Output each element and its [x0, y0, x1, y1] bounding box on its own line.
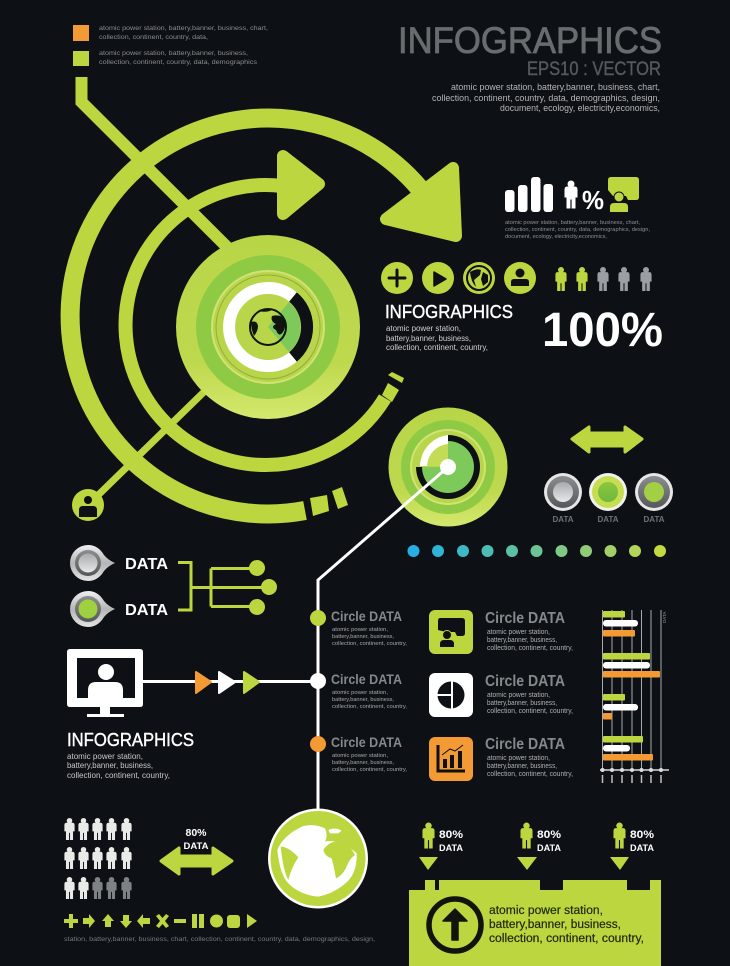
horizontal bar chart	[600, 610, 669, 783]
stat: person three: DATA	[630, 843, 654, 854]
timeline item: lime	[310, 608, 407, 647]
legend: top left: atomic power station, battery,banner, business, chart,	[99, 25, 268, 32]
pictogram: five people	[555, 267, 652, 291]
icon: person node	[72, 489, 104, 521]
icon: up arrow circle	[429, 899, 481, 951]
caption: icon group: collection, continent, country, data, demographics, design,	[505, 227, 650, 233]
stat: person one	[419, 822, 463, 870]
arrow: double headed left	[161, 848, 232, 874]
title block: collection, continent, country, data, demographics, design,	[432, 93, 660, 103]
stat: person two: 80%	[537, 829, 561, 841]
card: chat icon: atomic power station,	[487, 629, 550, 636]
button: gray: DATA	[552, 515, 574, 524]
text block: infographics left: battery,banner, business,	[67, 761, 153, 770]
button: gray and lime: DATA	[643, 515, 665, 524]
timeline item: orange: battery,banner, business,	[332, 760, 394, 766]
icon group: bars, person, percent, chat	[505, 177, 639, 215]
timeline item: orange: Circle DATA	[331, 734, 402, 750]
card: pie icon: atomic power station,	[487, 692, 550, 699]
main target circle	[176, 235, 360, 419]
text block: infographics	[385, 302, 513, 352]
connector with arrows	[143, 672, 318, 693]
card: chat icon: Circle DATA	[485, 610, 565, 627]
card: pie icon: collection, continent, country,	[487, 708, 573, 715]
card: chart icon: atomic power station,	[487, 755, 550, 762]
legend: top left: atomic power station, battery,banner, business,	[99, 50, 248, 57]
icon: globe	[250, 309, 286, 345]
icon: globe	[463, 262, 495, 294]
tree diagram	[178, 560, 277, 615]
line: lower left connector	[88, 388, 208, 505]
text block: infographics: collection, continent, country,	[386, 343, 488, 352]
icon: monitor with person	[67, 649, 143, 717]
title block	[398, 20, 662, 113]
arrow: double headed right	[572, 427, 642, 452]
timeline item: lime: battery,banner, business,	[332, 634, 394, 640]
card: pie icon	[429, 673, 573, 717]
card: chart icon: Circle DATA	[485, 736, 565, 753]
text block: infographics: INFOGRAPHICS	[385, 302, 513, 322]
pin: data lime: DATA	[125, 602, 168, 619]
pie chart	[416, 435, 480, 499]
globe	[268, 808, 368, 908]
timeline item: orange: atomic power station,	[332, 753, 389, 759]
text block: infographics left: atomic power station,	[67, 752, 143, 761]
legend: top left: collection, continent, country, data, demographics	[99, 59, 258, 66]
icon: person	[564, 180, 578, 208]
icon: bar chart	[505, 177, 553, 212]
stat: person two	[517, 822, 561, 870]
card: pie icon: Circle DATA	[485, 673, 565, 690]
stat: person three	[610, 822, 654, 870]
timeline item: white: atomic power station,	[332, 690, 389, 696]
stat: person one: DATA	[439, 843, 463, 854]
text: battery caption: atomic power station,	[489, 905, 603, 917]
legend: top left	[73, 25, 268, 66]
caption: symbols: station, battery,banner, business, chart, collection, continent, country, data, demographics, design,	[64, 936, 375, 943]
arrow: white	[219, 672, 235, 693]
caption: icon group: document, ecology, electricity,economics,	[505, 234, 607, 240]
timeline item: lime: collection, continent, country,	[332, 641, 407, 647]
text block: infographics: battery,banner, business,	[386, 334, 471, 343]
text block: infographics: atomic power station,	[386, 324, 461, 333]
timeline item: lime: Circle DATA	[331, 608, 402, 624]
arrow: outer arc	[70, 118, 456, 516]
text block: infographics left: INFOGRAPHICS	[67, 730, 194, 750]
pictogram: people grid	[64, 818, 132, 899]
horizontal bar chart: DATA	[662, 612, 667, 623]
timeline line	[318, 467, 448, 812]
icon row: plus, play, globe, user	[381, 262, 536, 294]
arrow: inner arc	[126, 156, 404, 465]
stat: person two: DATA	[537, 843, 561, 854]
stat: person one: 80%	[439, 829, 463, 841]
arrow: orange	[196, 672, 211, 693]
card: chat icon: collection, continent, country,	[487, 645, 573, 652]
card: chat icon	[429, 610, 573, 654]
caption: icon group	[505, 220, 650, 240]
title block: INFOGRAPHICS	[398, 20, 662, 61]
text: battery caption: collection, continent, country,	[489, 933, 644, 945]
icon row: symbols	[64, 914, 257, 928]
label: 80% data	[184, 827, 209, 852]
stat: person three: 80%	[630, 829, 654, 841]
icon: play	[422, 262, 454, 294]
icon: plus	[381, 262, 413, 294]
buttons: three data	[544, 473, 673, 524]
percent sign: %	[582, 185, 604, 215]
label: 80% data: DATA	[184, 841, 209, 852]
title block: document, ecology, electricity,economics,	[500, 103, 660, 113]
icon: user	[504, 262, 536, 294]
card: pie icon: battery,banner, business,	[487, 700, 557, 707]
text: battery caption: battery,banner, business,	[489, 919, 621, 931]
line: upper left connector	[82, 77, 228, 248]
timeline item: orange	[310, 734, 407, 773]
pin: data lime	[70, 591, 168, 627]
secondary target circle	[388, 408, 508, 526]
timeline item: white	[310, 671, 407, 710]
text block: infographics left: collection, continent, country,	[67, 771, 170, 780]
pin: data gray	[70, 545, 168, 581]
label: 80% data: 80%	[185, 827, 207, 839]
icon: chat person	[608, 177, 639, 212]
hub dot	[440, 459, 456, 475]
number: 100%: 100%	[542, 304, 663, 357]
button: lime: DATA	[597, 515, 619, 524]
timeline item: white: Circle DATA	[331, 671, 402, 687]
timeline item: orange: collection, continent, country,	[332, 767, 407, 773]
card: chart icon: collection, continent, country,	[487, 771, 573, 778]
card: chat icon: battery,banner, business,	[487, 637, 557, 644]
text block: infographics left	[67, 730, 194, 780]
timeline item: white: collection, continent, country,	[332, 704, 407, 710]
timeline item: lime: atomic power station,	[332, 627, 389, 633]
caption: icon group: atomic power station, battery,banner, business, chart,	[505, 220, 640, 226]
card: chart icon	[429, 736, 573, 781]
concentric arrows and connector lines	[70, 77, 456, 516]
battery panel	[409, 880, 661, 966]
title block: EPS10 : VECTOR	[527, 59, 661, 80]
donut chart	[229, 288, 307, 366]
text: battery caption	[489, 905, 644, 945]
arrow: lime	[244, 672, 259, 693]
title block: atomic power station, battery,banner, business, chart,	[451, 82, 660, 92]
pin: data gray: DATA	[125, 556, 168, 573]
timeline item: white: battery,banner, business,	[332, 697, 394, 703]
legend: top left: collection, continent, country, data,	[99, 34, 208, 41]
card: chart icon: battery,banner, business,	[487, 763, 557, 770]
dotted gradient row	[408, 545, 666, 557]
